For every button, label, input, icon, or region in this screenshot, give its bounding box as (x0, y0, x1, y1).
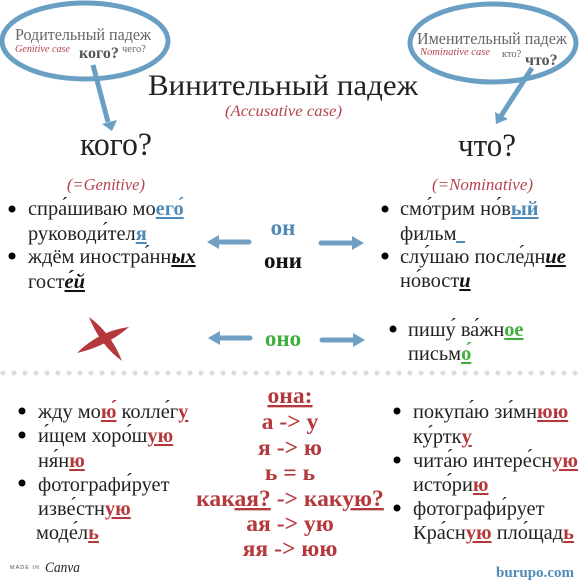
icon: red cross (77, 317, 129, 361)
arrow: оно right (322, 333, 365, 347)
credit: made in canva (10, 560, 80, 576)
rules: feminine endings: яя -> юю (243, 536, 337, 562)
rules: feminine endings: ь = ь (265, 460, 315, 486)
list: feminine animate examples (18, 399, 188, 544)
list: masculine and plural animate examples: ждём иностра́нных (27, 244, 196, 268)
callout: nominative case: кто? (502, 49, 522, 60)
callout: nominative case: Nominative case (419, 47, 491, 58)
list: feminine inanimate examples: покупа́ю зи́мнюю (413, 399, 568, 423)
list: masculine and plural inanimate examples: но́вости (400, 268, 471, 292)
callout: genitive case (2, 3, 168, 79)
label: он: он (271, 215, 295, 240)
callout: genitive case: Родительный падеж (15, 25, 151, 44)
callout: genitive case: чего? (122, 44, 146, 55)
rules: feminine endings: а -> у (262, 409, 319, 435)
list: masculine and plural inanimate examples (382, 196, 566, 292)
arrow: оно left (208, 331, 250, 345)
list: feminine inanimate examples (394, 399, 578, 544)
arrow: он/они left (207, 235, 249, 249)
credit: made in canva: Canva (45, 560, 80, 576)
rules: feminine endings: какая? -> какую? (196, 486, 384, 512)
list: feminine inanimate examples: фотографи́рует (413, 496, 545, 520)
arrow: nominative callout to что (495, 68, 532, 124)
list: masculine and plural inanimate examples: слу́шаю после́дние (400, 244, 566, 268)
rules: feminine endings: ая -> ую (246, 511, 334, 537)
list: feminine animate examples: жду мою́ колле́гу (37, 399, 188, 423)
list: feminine inanimate examples: ку́ртку (413, 424, 472, 448)
list: neuter examples: пишу́ ва́жное (408, 317, 523, 341)
list: neuter examples: письмо́ (408, 341, 471, 365)
credit: made in canva: MADE IN (10, 565, 40, 571)
callout: genitive case: Genitive case (15, 44, 71, 55)
heading: кого: кого? (80, 127, 152, 163)
label: genitive: (=Genitive) (67, 175, 145, 194)
rules: feminine endings (196, 383, 384, 562)
callout: nominative case: Именительный падеж (417, 29, 568, 48)
list: masculine and plural animate examples: спра́шиваю моего́ (28, 196, 184, 220)
heading: что: что? (458, 128, 516, 164)
title: Винительный падеж (148, 69, 418, 102)
callout: genitive case: кого? (79, 45, 119, 62)
list: feminine animate examples: и́щем хоро́шую (38, 423, 173, 447)
list: neuter examples (390, 317, 523, 365)
label: оно: оно (265, 326, 301, 351)
list: masculine and plural inanimate examples: фильм (400, 223, 457, 245)
callout: nominative case: что? (525, 52, 558, 69)
rules: feminine endings: я -> ю (258, 435, 322, 461)
arrow: он/они right (321, 236, 364, 250)
dotted divider (3, 370, 578, 376)
list: feminine inanimate examples: исто́рию (413, 472, 489, 496)
label: они: они (264, 248, 302, 273)
list: feminine inanimate examples: чита́ю интере́сную (413, 448, 578, 472)
list: feminine animate examples: изве́стную (38, 496, 131, 520)
label: nominative: (=Nominative) (432, 175, 533, 194)
list: masculine and plural animate examples: руководи́теля (28, 221, 147, 245)
list: masculine and plural inanimate examples: смо́трим но́вый (400, 196, 539, 220)
subtitle: (Accusative case) (225, 103, 342, 120)
list: feminine animate examples: фотографи́рует (38, 472, 170, 496)
callout: nominative case (410, 4, 576, 82)
list: masculine and plural animate examples (8, 196, 196, 293)
arrow: genitive callout to кого (93, 65, 117, 131)
list: feminine inanimate examples: Кра́сную пло́щадь (413, 520, 574, 544)
list: feminine animate examples: моде́ль (36, 520, 99, 544)
list: feminine animate examples: ня́ню (38, 448, 85, 472)
rules: feminine endings: она: (267, 383, 313, 409)
list: masculine and plural animate examples: госте́й (28, 269, 85, 293)
